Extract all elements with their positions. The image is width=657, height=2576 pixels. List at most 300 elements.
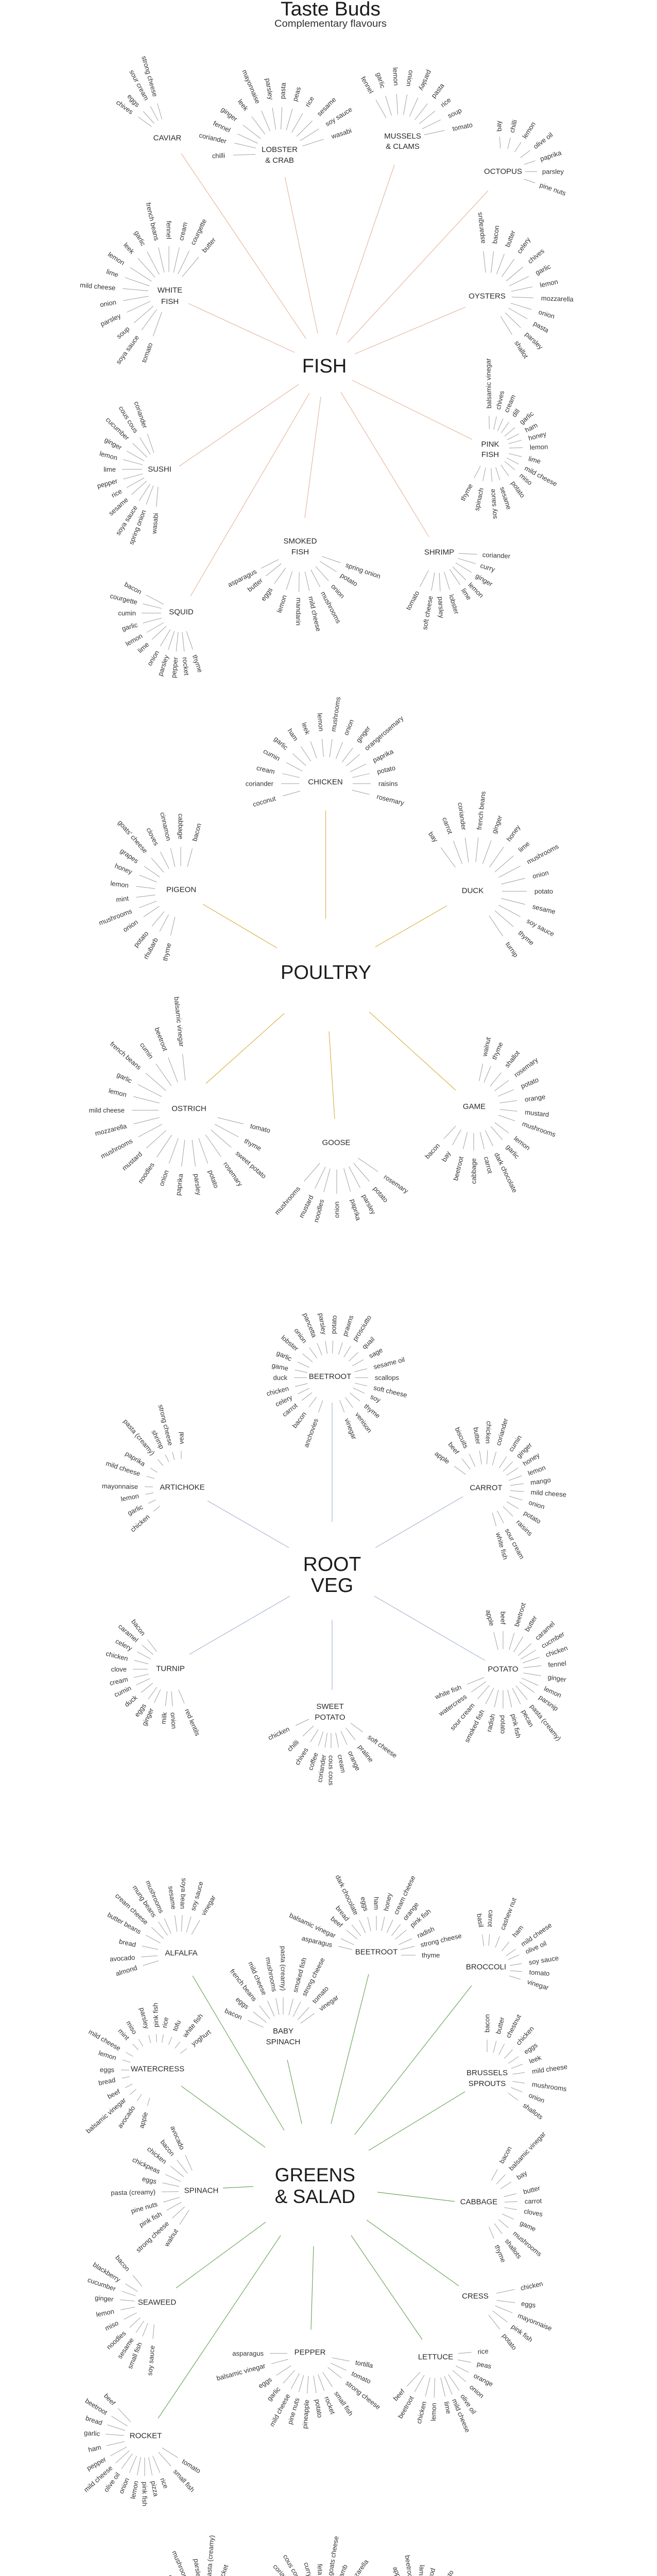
flavour spokes: strong cheese	[140, 55, 159, 97]
flavour spokes: cucumber	[105, 416, 131, 442]
flavour spokes right: parsley	[437, 596, 445, 619]
node label: PIGEON	[166, 885, 196, 894]
flavour spokes right: rosemary	[512, 1056, 540, 1079]
flavour spokes	[495, 119, 567, 197]
flavour spokes left: cream	[256, 764, 275, 775]
flavour spokes: sesame	[107, 496, 130, 517]
flavour spokes left: beetroot	[84, 2397, 109, 2416]
flavour spokes right: yoghurt	[190, 2028, 213, 2047]
flavour spokes right: honey	[522, 1451, 541, 1467]
flavour spokes right: cumin	[507, 1434, 523, 1453]
flavour spokes right: veal	[177, 1432, 185, 1444]
node label: BRUSSELS	[466, 2068, 508, 2077]
flavour spokes left: parsley	[264, 78, 275, 100]
heading: root veg: VEG	[311, 1574, 353, 1597]
flavour spokes left: beetroot	[396, 2395, 416, 2420]
flavour spokes right: mustard	[525, 1108, 549, 1118]
flavour spokes right: mild cheese	[530, 1488, 567, 1498]
node label: GAME	[463, 1103, 486, 1111]
node label: OSTRICH	[171, 1105, 206, 1113]
flavour spokes: mushrooms	[511, 2229, 543, 2258]
flavour spokes left: carrot	[486, 1910, 495, 1927]
connector lines: greens	[158, 1974, 472, 2418]
flavour spokes left: milk	[160, 1711, 168, 1724]
flavour spokes left: sesame	[167, 1886, 178, 1910]
flavour spokes left: rhubarb	[142, 937, 160, 960]
flavour spokes left: pasta (creamy)	[122, 1417, 157, 1456]
flavour spokes right: peas	[476, 2360, 492, 2370]
flavour spokes: chestnut	[504, 2013, 523, 2039]
flavour spokes right: orangerosemary	[363, 714, 405, 752]
flavour spokes left: bacon	[423, 1142, 441, 1160]
flavour spokes left: lemon	[316, 713, 325, 732]
flavour spokes left: soy sauce	[489, 488, 498, 519]
flavour spokes right: small fish	[333, 2389, 355, 2417]
flavour spokes: lemon	[99, 450, 118, 462]
flavour spokes: chickpeas	[131, 2156, 162, 2175]
node label: DUCK	[462, 886, 483, 895]
flavour spokes: sour cream	[128, 69, 150, 101]
flavour spokes left: butter beans	[106, 1911, 143, 1936]
node: white fish	[80, 202, 217, 366]
flavour spokes left: parsley	[99, 312, 122, 328]
flavour spokes right: orange	[347, 1750, 362, 1772]
flavour spokes right: onion	[342, 718, 355, 736]
flavour spokes: leek	[528, 2054, 543, 2065]
flavour spokes left: beef	[102, 2392, 117, 2407]
node: spinach	[111, 2125, 218, 2254]
flavour spokes right: parsnip	[538, 1693, 560, 1713]
node: mussels and clams	[359, 67, 473, 150]
flavour spokes: mozzarella	[541, 294, 574, 303]
flavour spokes left: chicken	[267, 1725, 291, 1741]
node label: SUSHI	[148, 465, 171, 474]
flavour spokes: chicken	[520, 2280, 544, 2292]
flavour spokes right: rosemary	[383, 1173, 410, 1195]
flavour spokes right: lime	[528, 455, 542, 465]
flavour spokes left: parsley	[317, 1312, 328, 1335]
heading: greens and salad: & SALAD	[275, 2186, 355, 2207]
flavour spokes left: cream	[109, 1675, 129, 1687]
node: artichoke	[102, 1403, 205, 1534]
flavour spokes left	[105, 1618, 171, 1727]
flavour spokes	[486, 2130, 547, 2263]
flavour spokes right: sesame	[498, 486, 513, 511]
node: chicken	[246, 696, 405, 808]
flavour spokes left: avocado	[110, 1954, 135, 1963]
flavour spokes left: eggs	[100, 2066, 115, 2074]
flavour spokes right: mushrooms	[319, 590, 342, 625]
flavour spokes right: french beans	[475, 791, 487, 830]
flavour spokes right: chives	[494, 390, 506, 410]
flavour spokes right	[484, 358, 559, 511]
flavour spokes left: chilli	[212, 151, 225, 160]
flavour spokes: chives	[115, 98, 135, 116]
heading: fish: FISH	[302, 355, 347, 377]
flavour spokes right: raisins	[378, 780, 398, 787]
flavour spokes right: goats cheese	[326, 2536, 340, 2576]
flavour spokes right: strong cheese	[300, 1956, 326, 1997]
flavour spokes left: duck	[273, 1374, 287, 1382]
flavour spokes left: mustard	[120, 1150, 144, 1172]
flavour spokes left: noodles	[312, 1198, 325, 1223]
flavour spokes right	[326, 696, 405, 807]
flavour spokes left: mint	[116, 2027, 131, 2042]
flavour spokes: rice	[110, 487, 123, 499]
flavour spokes left: butter	[246, 577, 264, 594]
node label: GOOSE	[322, 1139, 351, 1147]
node label: BEETROOT	[355, 1947, 397, 1957]
flavour spokes	[486, 2280, 553, 2351]
flavour spokes right	[277, 82, 354, 150]
flavour spokes left: tomato	[140, 342, 154, 364]
heading: greens and salad: GREENS	[275, 2164, 355, 2185]
flavour spokes left: thyme	[161, 942, 172, 962]
flavour spokes left: eggs	[359, 1896, 370, 1912]
flavour spokes right: parsley	[360, 1193, 377, 1216]
flavour spokes left: apple	[137, 2111, 149, 2129]
flavour spokes: ginger	[103, 436, 124, 452]
flavour spokes right: potato	[376, 764, 396, 775]
flavour spokes: ginger	[95, 2294, 114, 2303]
flavour spokes left: eggs	[260, 586, 274, 602]
flavour spokes: pepper	[96, 477, 118, 490]
flavour spokes: bacon	[483, 2014, 491, 2032]
flavour spokes right	[327, 1720, 399, 1786]
flavour spokes right: mandarin	[295, 598, 303, 625]
flavour spokes left	[475, 1910, 495, 1946]
flavour spokes: game	[518, 2219, 537, 2233]
flavour spokes left: garlic	[275, 1349, 293, 1363]
flavour spokes left: dark chocolate	[334, 1874, 360, 1916]
flavour spokes left: olive oil	[102, 2471, 122, 2494]
node: seaweed	[87, 2253, 176, 2376]
flavour spokes left: carrot	[281, 1401, 299, 1418]
flavour spokes left	[223, 1946, 287, 2031]
flavour spokes right: onion	[330, 583, 346, 600]
node label: LETTUCE	[418, 2352, 453, 2362]
node label: PEPPER	[295, 2348, 326, 2357]
flavour spokes left: beef	[106, 2088, 122, 2100]
flavour spokes left: ham	[373, 1897, 380, 1910]
flavour spokes left: cumin	[139, 1041, 155, 1060]
node label: LOBSTER	[262, 145, 298, 154]
subtitle: Complementary flavours	[274, 19, 387, 29]
flavour spokes right: soy	[369, 1393, 382, 1404]
flavour spokes right: paprika	[371, 748, 395, 764]
node: turnip	[105, 1618, 202, 1737]
flavour spokes left: paprika	[124, 1450, 147, 1468]
flavour spokes right: soy sauce	[528, 1954, 559, 1967]
node: pepper greens	[216, 2348, 382, 2429]
flavour spokes right: honey	[527, 430, 547, 442]
flavour spokes left: lime	[106, 267, 119, 279]
flavour spokes right: pink fish	[141, 2482, 148, 2506]
flavour spokes: shallots	[504, 2238, 523, 2260]
flavour spokes left: almond	[115, 1964, 138, 1977]
flavour spokes right: potato	[372, 1185, 390, 1204]
flavour spokes left: caramel	[117, 1622, 140, 1644]
flavour spokes right: potato	[510, 480, 527, 499]
flavour spokes right: cucmber	[540, 1630, 566, 1650]
flavour spokes: small fish	[126, 2341, 144, 2370]
flavour spokes right: curry	[479, 562, 496, 573]
flavour spokes: balsamic vinegar	[507, 2130, 547, 2172]
flavour spokes right: wasabi	[330, 127, 353, 141]
flavour spokes right: ginger	[490, 814, 504, 835]
node: cress	[462, 2280, 553, 2351]
node label: TURNIP	[156, 1664, 185, 1673]
flavour spokes right: orange	[472, 2371, 494, 2388]
flavour spokes right	[170, 218, 217, 279]
flavour spokes right: pasta (creamy)	[529, 1703, 563, 1742]
flavour spokes left: asparagus	[232, 2349, 264, 2358]
flavour spokes left: cumin	[113, 1684, 132, 1699]
node label: PINK	[481, 440, 499, 448]
flavour spokes right: fennel	[548, 1659, 567, 1669]
flavour spokes right: tomato	[250, 1122, 271, 1134]
flavour spokes right: thyme	[191, 654, 204, 673]
flavour spokes left: coriander	[316, 1754, 327, 1783]
node: baby spinach	[223, 1946, 340, 2046]
flavour spokes left: soya sauce	[114, 334, 141, 366]
node: celery	[391, 2555, 487, 2576]
flavour spokes: carrot	[525, 2197, 542, 2205]
flavour spokes: eggs	[126, 93, 142, 109]
flavour spokes left	[143, 2550, 206, 2576]
flavour spokes left: asparagus	[301, 1934, 333, 1949]
flavour spokes left: cumin	[118, 609, 136, 617]
flavour spokes right	[436, 550, 511, 619]
flavour spokes left: feta	[316, 2564, 324, 2575]
flavour spokes left	[273, 1161, 341, 1223]
flavour spokes: olive oil	[532, 131, 555, 150]
flavour spokes left: mayonnaise	[240, 69, 262, 105]
flavour spokes left: onion	[158, 1169, 170, 1187]
node: cabbage	[460, 2130, 547, 2263]
node label: CABBAGE	[460, 2198, 497, 2206]
flavour spokes right: pasta	[279, 82, 287, 99]
node: duck	[427, 791, 560, 959]
flavour spokes: spring onion	[127, 509, 148, 546]
flavour spokes left: avocado	[116, 2104, 136, 2130]
flavour spokes right: lime	[517, 840, 531, 854]
flavour spokes right	[295, 553, 382, 632]
flavour spokes left: onion	[333, 1201, 341, 1218]
flavour spokes left: lemon	[391, 67, 400, 86]
flavour spokes right: praline	[356, 1743, 375, 1764]
flavour spokes right	[183, 1880, 217, 1937]
flavour spokes right: vinegar	[526, 1978, 550, 1992]
flavour spokes left: chicken	[129, 1513, 151, 1534]
flavour spokes: pasta	[532, 319, 550, 334]
flavour spokes right	[378, 1874, 462, 1959]
flavour spokes left	[98, 811, 184, 962]
node: beetroot greens	[288, 1874, 462, 1959]
node: alfalfa	[106, 1878, 217, 1977]
node label: SPINACH	[184, 2187, 218, 2195]
flavour spokes left: game	[271, 1361, 289, 1372]
flavour spokes left: noodles	[136, 1161, 156, 1185]
flavour spokes right: spring onion	[344, 561, 382, 580]
flavour spokes left: lemon	[429, 2403, 438, 2421]
flavour spokes left: coffee	[306, 1752, 320, 1771]
flavour spokes left: beef	[499, 1612, 507, 1624]
flavour spokes left: garlic	[84, 2429, 100, 2437]
flavour spokes right: prawns	[341, 1314, 355, 1337]
flavour spokes right: mushrooms	[525, 842, 560, 866]
node label: OYSTERS	[469, 292, 506, 301]
flavour spokes right: sour cream	[504, 1527, 526, 1561]
flavour spokes: cous cous	[117, 404, 140, 434]
flavour spokes left	[459, 464, 498, 519]
flavour spokes	[96, 400, 162, 546]
flavour spokes left: balsamic vinegar	[172, 996, 186, 1047]
flavour spokes left: french beans	[144, 202, 161, 242]
flavour spokes right	[168, 1688, 202, 1737]
node label: WATERCRESS	[131, 2065, 184, 2073]
flavour spokes left: goats' cheese	[116, 819, 149, 855]
node label: SPROUTS	[469, 2079, 506, 2088]
flavour spokes left: ginger	[140, 1706, 155, 1727]
flavour spokes left: ginger	[219, 106, 239, 123]
flavour spokes left: beetroot	[153, 1026, 169, 1052]
node label: & CLAMS	[386, 142, 420, 150]
flavour spokes left: mushrooms	[99, 1137, 134, 1160]
flavour spokes: parsley	[542, 168, 564, 175]
flavour spokes right: lemon	[512, 1134, 532, 1151]
flavour spokes right: rocket	[323, 2395, 337, 2415]
flavour spokes left: cabbage	[177, 814, 184, 839]
flavour spokes left: chicken	[415, 2400, 428, 2425]
flavour spokes right: thyme	[422, 1952, 440, 1959]
flavour spokes right: beetroot	[513, 1602, 527, 1628]
node: sweet potato	[267, 1702, 399, 1786]
panel: fish	[80, 55, 574, 679]
flavour spokes left: smoked fish	[463, 1708, 486, 1744]
flavour spokes left: bread	[98, 2076, 116, 2087]
flavour spokes left: ham	[88, 2443, 102, 2454]
flavour spokes right: white fish	[494, 1531, 509, 1561]
flavour spokes: cucumber	[87, 2276, 117, 2293]
flavour spokes: celery	[515, 236, 532, 255]
flavour spokes right: cous cous	[327, 1755, 335, 1786]
flavour spokes left: bacon	[223, 2007, 244, 2021]
node label: OCTOPUS	[484, 167, 522, 176]
flavour spokes left: garlic	[121, 621, 139, 633]
flavour spokes right	[285, 1956, 340, 2026]
flavour spokes right: ginger	[474, 572, 494, 588]
flavour spokes right: ginger	[354, 724, 372, 744]
flavour spokes right: thyme	[243, 1137, 263, 1152]
flavour spokes left: french beans	[109, 1040, 143, 1072]
flavour spokes right: tomato	[181, 2458, 202, 2475]
flavour spokes left	[266, 1312, 331, 1448]
flavour spokes: pink fish	[138, 2210, 163, 2229]
flavour spokes	[483, 2013, 568, 2121]
node label: SMOKED	[283, 537, 317, 545]
flavour spokes left: chilli	[286, 1738, 301, 1753]
flavour spokes: butter	[523, 2184, 541, 2196]
flavour spokes left: asparagus	[227, 567, 258, 588]
flavour spokes right: turnip	[504, 940, 520, 959]
node: oysters	[469, 212, 574, 360]
flavour spokes left: onion	[146, 649, 161, 667]
flavour spokes right: raisins	[515, 1518, 534, 1537]
flavour spokes left	[404, 569, 438, 630]
flavour spokes right: pink fish	[409, 1907, 433, 1929]
flavour spokes left: mushrooms	[144, 1879, 165, 1914]
flavour spokes right: orange	[524, 1093, 546, 1104]
flavour spokes left	[434, 1421, 493, 1478]
flavour spokes left: garlic	[272, 735, 290, 752]
node label: CAVIAR	[153, 134, 182, 142]
flavour spokes left: chicken	[266, 1384, 289, 1398]
flavour spokes right: soup	[446, 106, 463, 120]
flavour spokes left: garlic	[126, 1503, 144, 1517]
node label: ROCKET	[130, 2432, 162, 2440]
flavour spokes right: ham	[511, 1924, 525, 1939]
node: sushi	[96, 400, 171, 546]
flavour spokes left: eggs	[133, 1702, 148, 1718]
panel: poultry	[89, 696, 560, 1223]
flavour spokes right: rice	[477, 2347, 489, 2355]
connector lines: root veg	[189, 1403, 485, 1690]
flavour spokes right	[151, 2003, 213, 2057]
flavour spokes left: lemon	[98, 2049, 117, 2062]
flavour spokes: lemon	[521, 121, 537, 140]
flavour spokes: lemon	[539, 278, 559, 289]
flavour spokes left: radish	[485, 1713, 497, 1733]
flavour spokes left	[433, 1609, 507, 1744]
flavour spokes left: potato	[132, 929, 150, 949]
flavour spokes left	[109, 580, 182, 679]
connector lines: fish	[179, 154, 488, 596]
flavour spokes: soy sauce	[146, 2345, 156, 2376]
flavour spokes left: leek	[300, 721, 312, 736]
flavour spokes left: lemon	[108, 1087, 127, 1098]
flavour spokes right: sesame	[532, 903, 556, 916]
flavour spokes right: caramel	[533, 1620, 556, 1641]
flavour spokes right: butter	[200, 236, 217, 254]
flavour spokes left: tomato	[404, 589, 421, 612]
flavour spokes right	[412, 81, 473, 139]
node label: ALFALFA	[165, 1948, 198, 1958]
flavour spokes right	[437, 2347, 494, 2433]
flavour spokes: asparagus	[475, 212, 487, 244]
node label: BABY	[273, 2027, 293, 2035]
flavour spokes: bacon	[498, 2145, 513, 2165]
flavour spokes right	[141, 2445, 202, 2506]
flavour spokes left: beetroot	[452, 1156, 465, 1181]
flavour spokes right: coriander	[494, 1417, 510, 1446]
flavour spokes right: paprika	[349, 1198, 362, 1222]
flavour spokes left: butter	[472, 1427, 482, 1445]
flavour spokes right: olive oil	[459, 2393, 478, 2416]
flavour spokes left: beef	[329, 1914, 344, 1929]
flavour spokes left: basil	[475, 1913, 485, 1928]
node: pink fish	[459, 358, 559, 519]
flavour spokes: chives	[526, 247, 546, 265]
node: watercress	[84, 2003, 213, 2135]
node: asparagus	[143, 2535, 230, 2576]
flavour spokes left: balsamic vinegar	[288, 1911, 337, 1940]
flavour spokes: parsley	[524, 330, 545, 351]
flavour spokes right: potato	[339, 571, 359, 588]
flavour spokes right: mild cheese	[451, 2398, 472, 2433]
flavour spokes left: ham	[286, 727, 300, 742]
node label: CRESS	[462, 2292, 489, 2301]
